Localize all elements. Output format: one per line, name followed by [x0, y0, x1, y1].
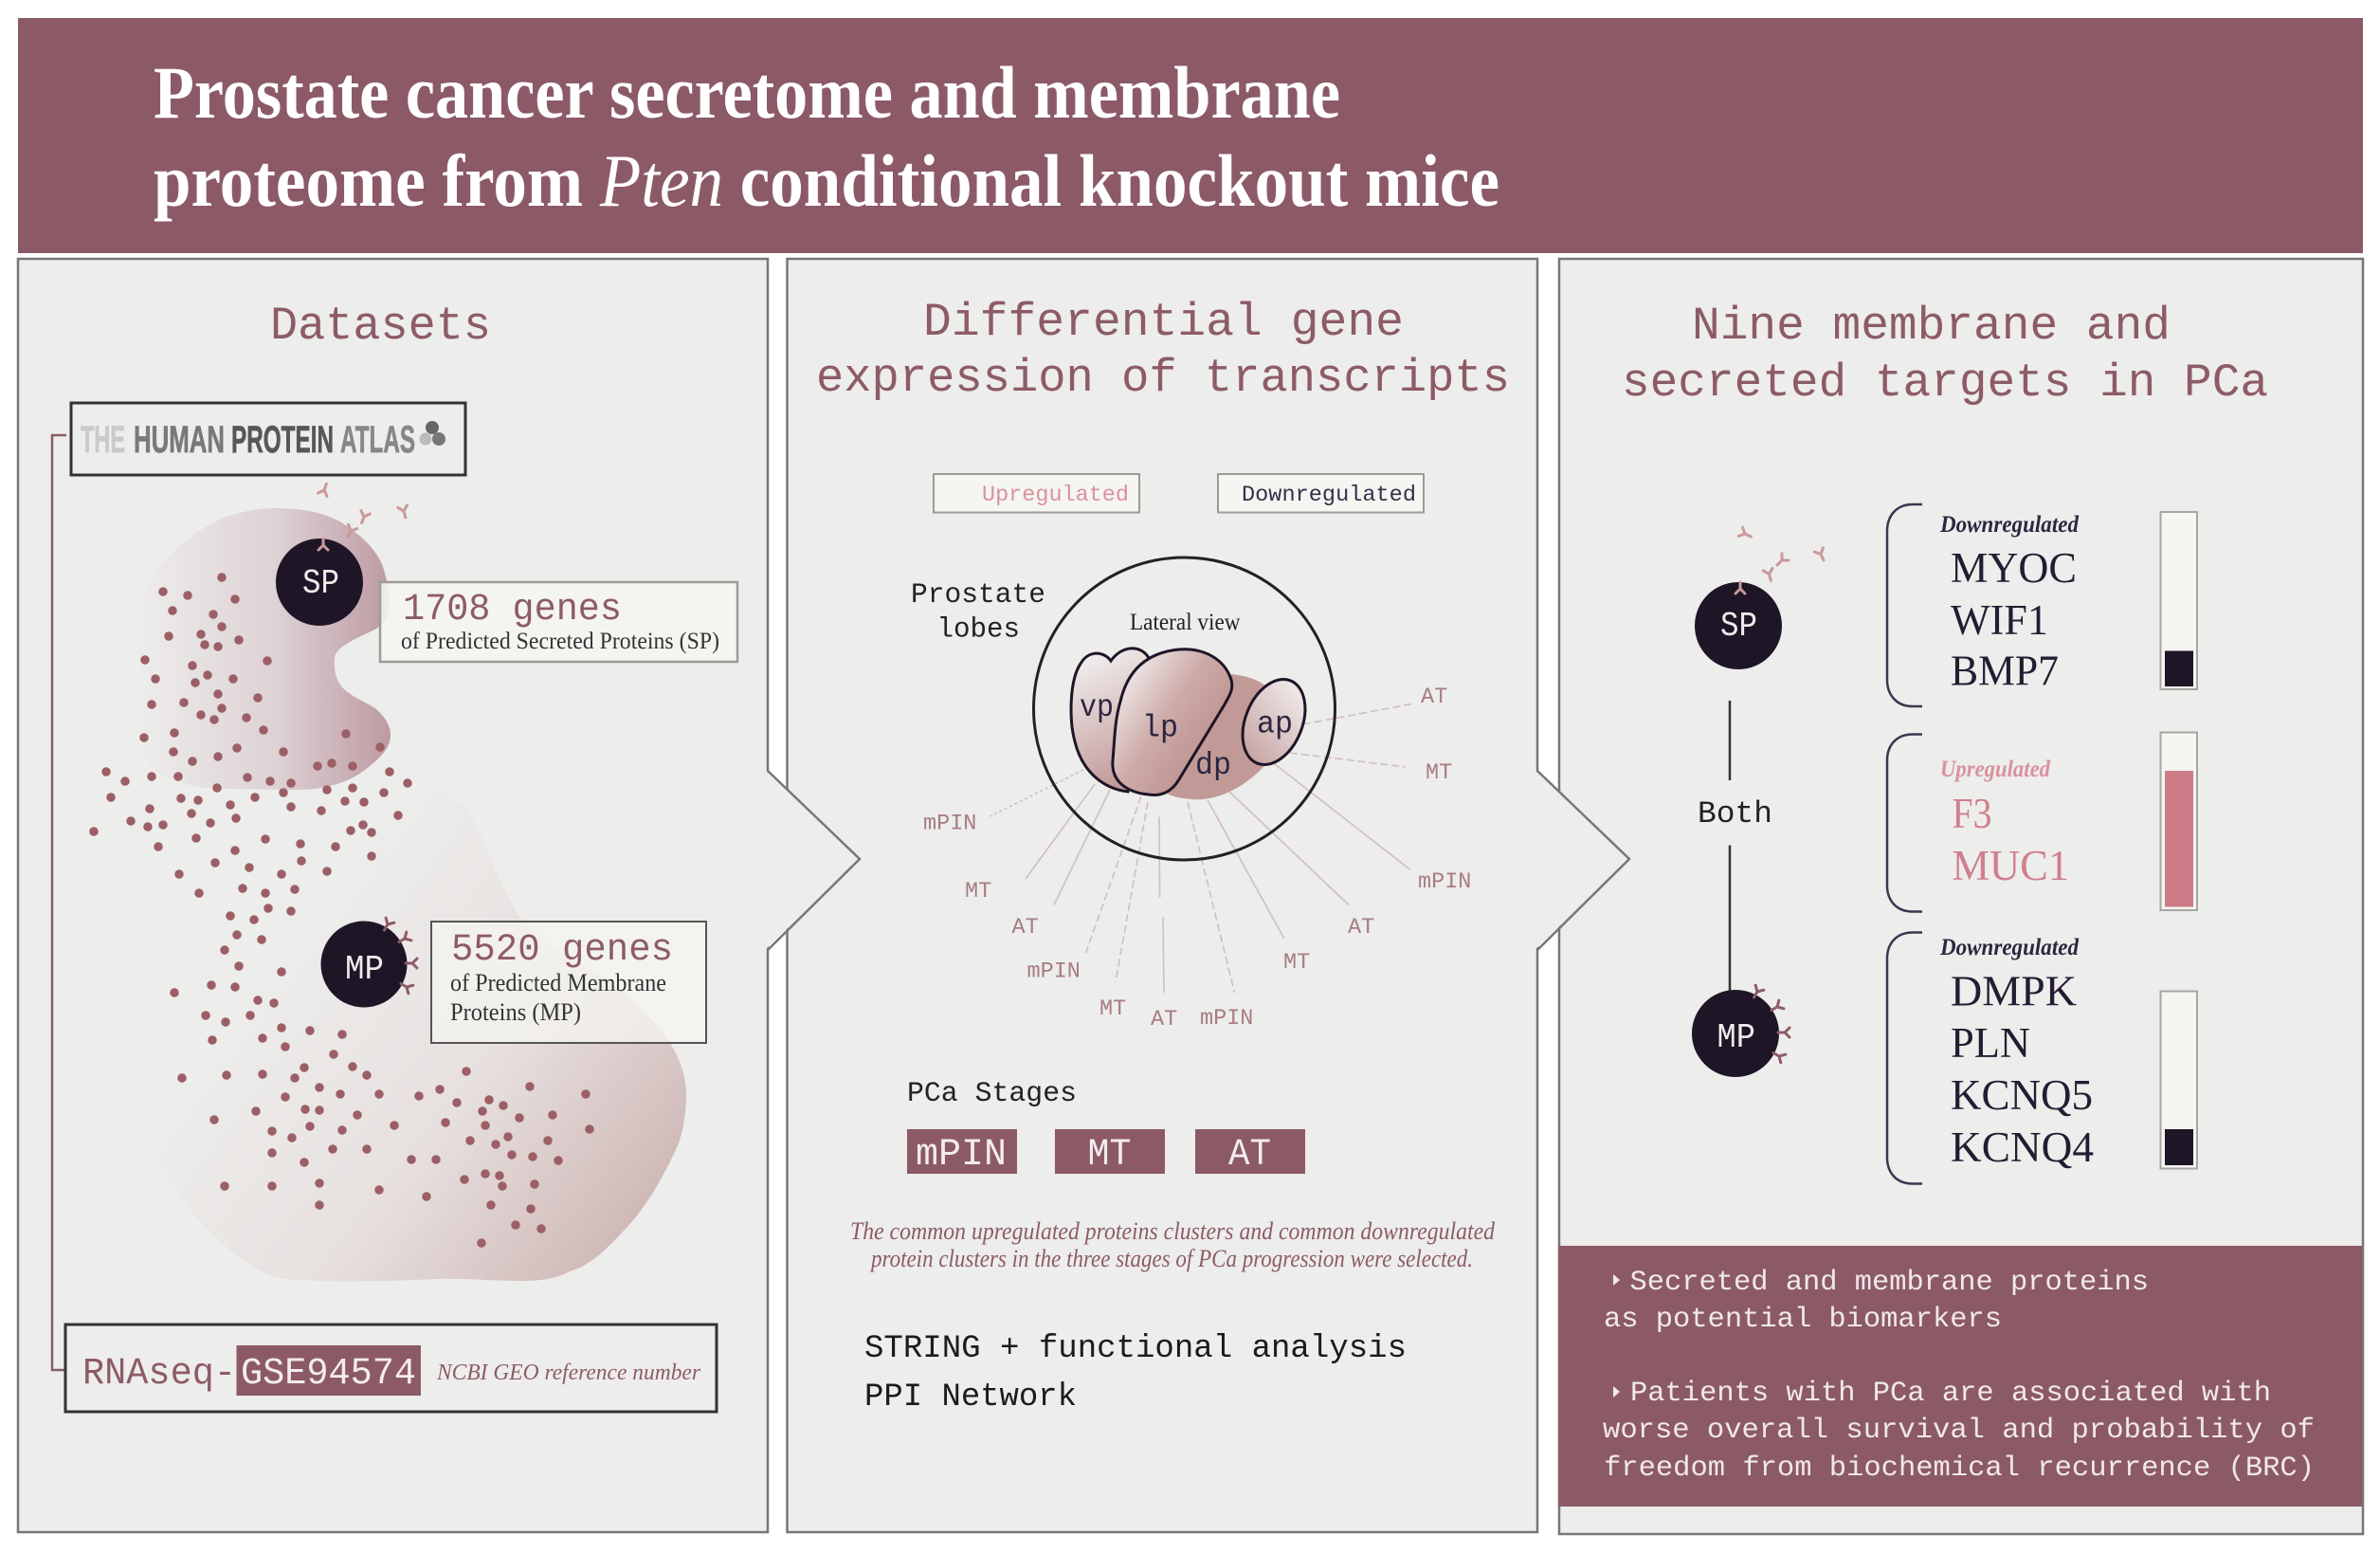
stage labels around the prostate: MT [965, 879, 991, 904]
gene list: secreted downregulated: WIF1 [1951, 596, 2048, 644]
stage chip: MT [1055, 1129, 1165, 1177]
MP circle: MP [345, 950, 384, 989]
heading: nine targets: secreted targets in PCa [1622, 356, 2268, 410]
heading: differential gene expression: expression of transcripts [816, 352, 1510, 405]
heading: nine targets [1622, 300, 2268, 410]
label: both: Both [1698, 796, 1772, 831]
title text [154, 51, 1499, 222]
callout: 5520 genes: 5520 genes [451, 929, 673, 972]
heading: differential gene expression: Differential gene [923, 296, 1404, 349]
stage chip: MT: MT [1088, 1134, 1132, 1177]
analysis text [864, 1331, 1407, 1416]
lobe: dorsal [1164, 674, 1270, 799]
Human Protein Atlas logo box: PROTEIN [231, 419, 334, 461]
lobe labels [1080, 690, 1293, 783]
heading: differential gene expression [816, 296, 1510, 405]
gene list: both upregulated [1940, 757, 2069, 889]
circle: lateral view of prostate [1033, 557, 1335, 860]
Human Protein Atlas logo box [71, 403, 465, 475]
title banner [18, 18, 2363, 253]
gene list: secreted downregulated [1939, 512, 2079, 694]
RNAseq reference box: GSE94574 [241, 1353, 416, 1396]
lobe: anterior [1231, 670, 1317, 774]
stage connector lines [990, 703, 1414, 993]
SP circle [1695, 582, 1782, 669]
arrow: differential expression to targets [1534, 769, 1629, 951]
icon: secreted antibodies [318, 483, 410, 539]
RNAseq reference box: RNAseq- [82, 1353, 236, 1396]
link between SP and Both [1729, 701, 1731, 780]
stage labels around the prostate: AT [1151, 1007, 1177, 1032]
analysis text: STRING + functional analysis [864, 1331, 1407, 1367]
SP circle [276, 539, 363, 626]
gene list: membrane downregulated: Downregulated [1939, 935, 2079, 960]
stage chip: AT [1195, 1129, 1305, 1177]
blob: membrane proteins region [142, 779, 686, 1281]
lobe labels: lp [1142, 711, 1178, 745]
conclusion: patient outcomes: freedom from biochemical recurrence (BRC) [1604, 1453, 2315, 1485]
SP circle: SP [1720, 607, 1757, 646]
lobe labels: vp [1080, 690, 1114, 725]
Human Protein Atlas logo box: HUMAN [134, 419, 225, 461]
RNAseq reference box [65, 1325, 717, 1412]
legend: downregulated: Downregulated [1242, 483, 1416, 508]
stage labels around the prostate: mPIN [1027, 959, 1081, 984]
stage labels around the prostate: AT [1421, 685, 1447, 710]
lobe labels: dp [1195, 748, 1231, 783]
SP circle: SP [302, 564, 339, 603]
panel: datasets [18, 259, 768, 1532]
blob: secreted proteins region [133, 508, 391, 790]
bracket: both upregulated [1887, 734, 1922, 912]
label: prostate lobes: Prostate [911, 578, 1045, 611]
heading: nine targets: Nine membrane and [1692, 300, 2171, 353]
gene list: membrane downregulated: KCNQ4 [1951, 1124, 2094, 1171]
stage chip: mPIN: mPIN [916, 1134, 1007, 1177]
bracket: secreted downregulated [1887, 504, 1922, 706]
stage labels around the prostate [923, 685, 1471, 1032]
label: lateral view: Lateral view [1130, 610, 1240, 635]
stage chip: AT: AT [1228, 1134, 1271, 1177]
analysis text: PPI Network [864, 1379, 1077, 1416]
callout: 5520 genes [431, 922, 706, 1043]
stage labels around the prostate: mPIN [923, 812, 976, 836]
conclusion: patient outcomes [1603, 1378, 2315, 1485]
conclusion: biomarkers: Secreted and membrane proteins [1630, 1267, 2149, 1299]
lobe labels: ap [1257, 707, 1293, 741]
icon: membrane antibodies [380, 918, 417, 994]
callout: 5520 genes: Proteins (MP) [450, 998, 581, 1026]
stage labels around the prostate: MT [1283, 950, 1310, 976]
legend: upregulated [934, 474, 1139, 512]
bar: both upregulated [2161, 732, 2197, 910]
gene list: both upregulated: Upregulated [1940, 757, 2050, 782]
bar: secreted downregulated [2161, 512, 2197, 689]
stage labels around the prostate: MT [1099, 996, 1126, 1022]
conclusion: biomarkers: as potential biomarkers [1604, 1304, 2002, 1336]
panel: nine targets [1558, 259, 2363, 1534]
callout: 5520 genes: of Predicted Membrane [450, 969, 666, 996]
gene list: both upregulated: MUC1 [1953, 842, 2069, 889]
stage labels around the prostate: mPIN [1418, 869, 1471, 895]
selection note: The common upregulated proteins clusters and common downregulated [850, 1217, 1496, 1245]
MP circle: MP [1717, 1018, 1755, 1057]
arrow: datasets to differential expression [764, 769, 860, 951]
lobe: ventral [1071, 649, 1149, 792]
gene list: membrane downregulated: KCNQ5 [1951, 1071, 2093, 1119]
gene list: membrane downregulated: PLN [1951, 1019, 2030, 1067]
selection note: protein clusters in the three stages of PCa progression were selected. [869, 1245, 1473, 1272]
stage labels around the prostate: AT [1012, 915, 1039, 941]
stage labels around the prostate: mPIN [1200, 1006, 1253, 1032]
scattered gene dots [94, 577, 590, 1243]
conclusion box [1558, 1246, 2362, 1507]
stage labels around the prostate: MT [1426, 760, 1452, 786]
gene list: membrane downregulated: DMPK [1951, 967, 2078, 1014]
callout: 1708 genes: 1708 genes [403, 589, 622, 631]
link between Both and MP [1729, 846, 1731, 991]
gene list: secreted downregulated: BMP7 [1951, 647, 2059, 694]
heading: datasets: Datasets [270, 300, 491, 353]
panel: differential gene expression [787, 259, 1537, 1532]
Human Protein Atlas logo box: THE [81, 419, 125, 461]
conclusion: biomarkers [1604, 1267, 2149, 1336]
lobe: lateral [1113, 649, 1232, 795]
title text: Prostate cancer secretome and membrane [154, 51, 1340, 134]
prostate lobes illustration [1071, 649, 1317, 799]
icon: membrane antibodies [1750, 985, 1790, 1063]
MP circle [320, 922, 408, 1007]
RNAseq reference box: NCBI GEO reference number [436, 1361, 701, 1385]
label: prostate lobes: lobes [936, 612, 1020, 645]
connector line between sources [52, 435, 66, 1370]
conclusion: patient outcomes: worse overall survival and probability of [1603, 1415, 2315, 1447]
selection note [850, 1217, 1496, 1272]
label: PCa stages: PCa Stages [907, 1077, 1077, 1109]
stage labels around the prostate: AT [1348, 915, 1374, 941]
icon: secreted antibodies [1738, 527, 1827, 582]
title text: proteome from Pten conditional knockout mice [154, 139, 1499, 222]
Human Protein Atlas logo box: ATLAS [340, 419, 415, 461]
callout: 1708 genes [380, 582, 737, 662]
gene list: secreted downregulated: MYOC [1951, 544, 2077, 592]
MP circle [1692, 990, 1779, 1077]
gene list: membrane downregulated [1939, 935, 2094, 1171]
legend: downregulated [1218, 474, 1424, 512]
bar: membrane downregulated [2161, 992, 2197, 1168]
callout: 1708 genes: of Predicted Secreted Proteins (SP) [401, 629, 719, 654]
gene list: both upregulated: F3 [1953, 790, 1992, 837]
bracket: membrane downregulated [1887, 933, 1922, 1183]
gene list: secreted downregulated: Downregulated [1939, 512, 2079, 538]
conclusion: patient outcomes: Patients with PCa are associated with [1630, 1378, 2271, 1410]
label: prostate lobes [911, 578, 1045, 645]
legend: upregulated: Upregulated [982, 483, 1129, 508]
